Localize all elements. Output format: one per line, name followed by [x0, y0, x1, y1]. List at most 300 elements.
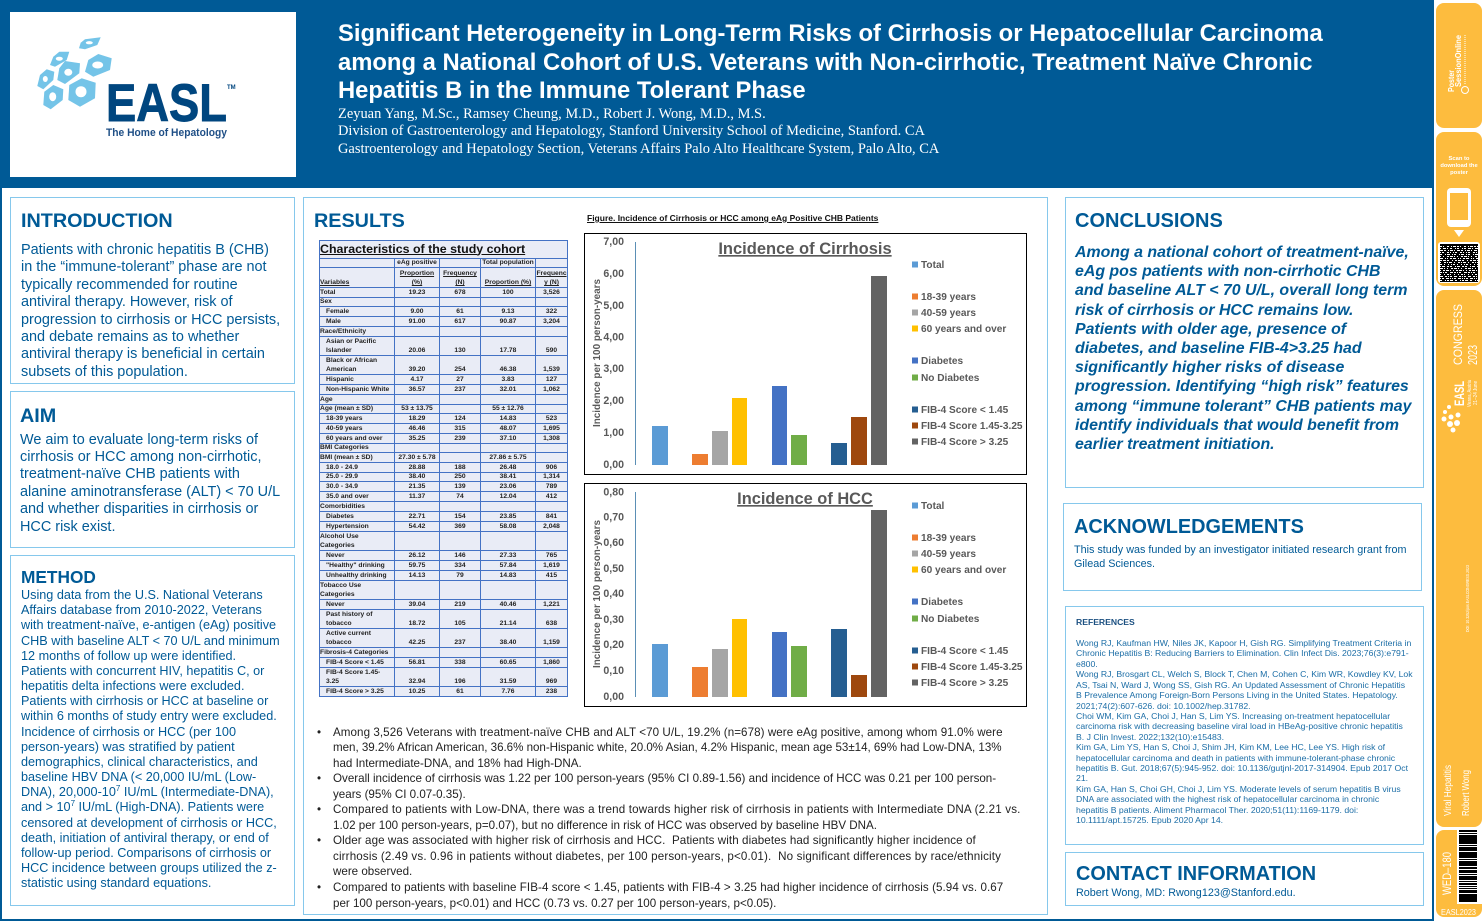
text: contact: Robert Wong, MD: Rwong123@Stanford.edu.: [1076, 886, 1296, 898]
bar chart: incidence of cirrhosis: Total: [921, 260, 945, 271]
panel: references: [1065, 606, 1424, 845]
sidebar: poster session online: SessionOnline: [1454, 34, 1463, 87]
text: method: demographics, clinical characteristics, and: [21, 755, 258, 769]
table: characteristics of the study cohort: Proportion (%): [485, 279, 531, 286]
table: characteristics of the study cohort: Asian or Pacific: [326, 338, 376, 345]
bar chart: incidence of HCC: 0,10: [603, 665, 624, 677]
text: method: Affairs database from 2010-2022, Veterans: [21, 603, 262, 617]
text: conclusions: and baseline ALT < 70 U/L, overall long term: [1075, 282, 1407, 299]
table: characteristics of the study cohort: 27: [456, 376, 464, 383]
sidebar: scan to download with phone and QR code: Scan to: [1449, 156, 1470, 162]
bar chart: incidence of HCC: 0,50: [603, 563, 624, 575]
frame right edge: [1432, 0, 1434, 921]
table: characteristics of the study cohort: 638: [546, 620, 557, 627]
table: characteristics of the study cohort: Male: [326, 318, 341, 325]
table: characteristics of the study cohort: 7.76: [501, 688, 515, 695]
text: method: Incidence of cirrhosis or HCC (per 100: [21, 725, 236, 739]
table: characteristics of the study cohort: 39.04: [409, 601, 425, 608]
table: characteristics of the study cohort: 91.00: [409, 318, 425, 325]
table: characteristics of the study cohort: 55 ± 12.76: [492, 405, 524, 412]
table: characteristics of the study cohort: Total: [320, 289, 335, 296]
table: characteristics of the study cohort: 1,619: [543, 562, 560, 569]
frame bottom edge: [0, 919, 1434, 921]
bar chart: incidence of HCC: Incidence per 100 person-years: [592, 520, 603, 668]
bar chart: incidence of cirrhosis: [584, 233, 1027, 475]
table: characteristics of the study cohort: 841: [546, 513, 557, 520]
table: characteristics of the study cohort: 617: [454, 318, 466, 325]
authors and affiliations: [338, 106, 940, 157]
table: characteristics of the study cohort: 789: [546, 483, 557, 490]
table: characteristics of the study cohort: 3.25: [326, 678, 339, 685]
sidebar: poster session online: [1436, 3, 1482, 128]
bar chart: incidence of cirrhosis: 3,00: [603, 363, 624, 375]
table: characteristics of the study cohort: 146: [454, 552, 466, 559]
bar chart: incidence of cirrhosis: 40-59 years: [921, 308, 976, 319]
bar chart: incidence of cirrhosis: 1,00: [603, 427, 624, 439]
text: aim: and whether disparities in cirrhosis or: [20, 501, 258, 517]
bar chart: incidence of HCC: 0,00: [603, 691, 624, 703]
table: characteristics of the study cohort: 60 years and over: [326, 435, 383, 442]
table: characteristics of the study cohort: 139: [454, 483, 466, 490]
table: characteristics of the study cohort: 46.46: [409, 425, 425, 432]
table: characteristics of the study cohort: Proportion (%): [400, 270, 434, 286]
table: characteristics of the study cohort: 19.23: [409, 289, 425, 296]
table: characteristics of the study cohort: 100: [502, 289, 514, 296]
sidebar: abstract number and barcode: [1436, 830, 1482, 917]
bar chart: incidence of cirrhosis: 7,00: [603, 236, 624, 248]
table: characteristics of the study cohort: 154: [454, 513, 466, 520]
table: characteristics of the study cohort: 415: [546, 572, 557, 579]
text: conclusions: eAg pos patients with non-cirrhotic CHB: [1075, 263, 1380, 280]
table: characteristics of the study cohort: Frequenc y (N): [536, 270, 567, 286]
text: introduction: subsets of this population.: [21, 364, 188, 380]
bar chart: incidence of HCC: Total: [921, 501, 945, 512]
table: characteristics of the study cohort: 237: [454, 639, 466, 646]
table: characteristics of the study cohort: American: [326, 366, 356, 373]
text: aim: alanine aminotransferase (ALT) < 70 U/L: [20, 484, 280, 500]
table: characteristics of the study cohort: 60.65: [500, 659, 516, 666]
table: characteristics of the study cohort: 18.0 - 24.9: [326, 464, 358, 471]
frame left edge: [0, 188, 2, 921]
text: method: 12 months of follow up were identified.: [21, 649, 236, 663]
text: references: hepatitis B. Gut. 2018;67(5):945-952. doi: 10.1136/gutjnl-2017-314904. Epub 2017 Oct: [1076, 763, 1408, 773]
table: characteristics of the study cohort: tobacco: [326, 620, 352, 627]
authors and affiliations: Zeyuan Yang, M.Sc., Ramsey Cheung, M.D., Robert J. Wong, M.D., M.S.: [338, 106, 766, 122]
table: characteristics of the study cohort: 1,159: [543, 639, 560, 646]
bar chart: incidence of HCC: 40-59 years: [921, 549, 976, 560]
text: introduction: progression to cirrhosis or HCC persists,: [21, 312, 280, 328]
sidebar: poster session panels: [1436, 3, 1482, 917]
table: characteristics of the study cohort: 14.13: [409, 572, 425, 579]
bar chart: incidence of HCC: 0,80: [603, 486, 624, 498]
text: method: Patients with concurrent HIV, hepatitis C, or: [21, 664, 264, 678]
table: characteristics of the study cohort: 322: [546, 308, 557, 315]
bar chart: incidence of HCC: 0,70: [603, 512, 624, 524]
table: characteristics of the study cohort: 23.85: [500, 513, 516, 520]
heading: contact information: CONTACT INFORMATION: [1076, 863, 1316, 885]
table: characteristics of the study cohort: 969: [546, 678, 557, 685]
title: Significant Heterogeneity in Long-Term Risks of Cirrhosis or Hepatocellular Carcinoma: [338, 20, 1323, 47]
table: characteristics of the study cohort: 219: [454, 601, 466, 608]
table: characteristics of the study cohort: 37.10: [500, 435, 516, 442]
table: characteristics of the study cohort: 23.06: [500, 483, 516, 490]
table: characteristics of the study cohort: 1,860: [543, 659, 560, 666]
table: characteristics of the study cohort: 48.07: [500, 425, 516, 432]
text: method: HCC incidence between groups utilized the z-: [21, 861, 277, 875]
table: characteristics of the study cohort: Race/Ethnicity: [320, 328, 366, 335]
results bullets: Among 3,526 Veterans with treatment-naïve CHB and ALT <70 U/L, 19.2% (n=678) were eAg positive, among whom 91.0% were: [333, 726, 1003, 738]
table: characteristics of the study cohort: Age: [320, 396, 333, 403]
bar chart: incidence of HCC: Incidence of HCC: [737, 490, 873, 508]
table: characteristics of the study cohort: 27.30 ± 5.78: [398, 454, 436, 461]
table: characteristics of the study cohort: 12.04: [500, 493, 516, 500]
table: characteristics of the study cohort: 90.87: [500, 318, 516, 325]
text: references: Kim GA, Han S, Choi GH, Choi J, Lim YS. Moderate levels of serum hepatitis B virus: [1076, 784, 1401, 794]
table: characteristics of the study cohort: 14.83: [500, 572, 516, 579]
heading: acknowledgements: ACKNOWLEDGEMENTS: [1074, 516, 1304, 538]
header band: [0, 0, 1434, 188]
results bullets: men, 39.2% African American, 36.6% non-Hispanic white, 20.0% Asian, 4.2% Hispanic, mean age 53±14, 69% had Low-DNA, 13%: [333, 741, 1002, 754]
table: characteristics of the study cohort: 79: [456, 572, 464, 579]
table: characteristics of the study cohort: tobacco: [326, 639, 352, 646]
table: characteristics of the study cohort: 27.86 ± 5.75: [489, 454, 527, 461]
table: characteristics of the study cohort: 27.33: [500, 552, 516, 559]
table: characteristics of the study cohort: 38.40: [409, 473, 425, 480]
text: conclusions: Among a national cohort of treatment-naïve,: [1075, 244, 1409, 261]
table: characteristics of the study cohort: 254: [454, 366, 466, 373]
table: characteristics of the study cohort: 38.41: [500, 473, 516, 480]
table: characteristics of the study cohort: BMI (mean ± SD): [320, 454, 373, 461]
text: references: e800.: [1076, 659, 1098, 669]
text: references: Wong RJ, Brosgart CL, Welch S, Block T, Chen M, Cohen C, Kim WR, Kowdley KV, Lok: [1076, 669, 1413, 679]
table: characteristics of the study cohort: Total population: [482, 259, 534, 266]
table: characteristics of the study cohort: 105: [454, 620, 466, 627]
table: characteristics of the study cohort: Categories: [320, 591, 355, 598]
text: acknowledgements: [1074, 544, 1406, 570]
figure caption: Figure. Incidence of Cirrhosis or HCC among eAg Positive CHB Patients: [587, 213, 878, 223]
text: references: hepatocellular carcinoma and death in patients with immune-tolerant-phase chronic: [1076, 753, 1395, 763]
text: conclusions: among “immune tolerant” CHB patients may: [1075, 398, 1411, 415]
results bullets: •: [317, 881, 321, 894]
bar chart: incidence of cirrhosis: Incidence per 100 person-years: [592, 279, 603, 427]
bar chart: incidence of HCC: 60 years and over: [921, 565, 1006, 576]
table: characteristics of the study cohort: Frequency (N): [443, 270, 477, 286]
bar chart: incidence of cirrhosis: 6,00: [603, 268, 624, 280]
table: characteristics of the study cohort: 31.59: [500, 678, 516, 685]
table: characteristics of the study cohort: 18-39 years: [326, 415, 362, 422]
table: characteristics of the study cohort: FIB-4 Score < 1.45: [326, 659, 384, 666]
results bullets: 1.02 per 100 person-years, p=0.07), but no difference in risk of HCC was observed by baseline HBV DNA.: [333, 819, 877, 832]
bar chart: incidence of cirrhosis: FIB-4 Score < 1.45: [921, 405, 1009, 416]
results bullets: •: [317, 803, 321, 816]
sidebar: abstract number and barcode: EASL2023: [1441, 908, 1476, 917]
table: characteristics of the study cohort: 28.88: [409, 464, 425, 471]
table: characteristics of the study cohort: Categories: [320, 542, 355, 549]
table: characteristics of the study cohort: FIB-4 Score 1.45-: [326, 669, 380, 676]
text: references: Kim GA, Lim YS, Han S, Choi J, Shim JH, Kim KM, Lee HC, Lee YS. High risk of: [1076, 742, 1385, 752]
text: references: Choi WM, Kim GA, Choi J, Han S, Lim YS. Increasing on-treatment hepatocellular: [1076, 711, 1390, 721]
bar chart: incidence of HCC: FIB-4 Score 1.45-3.25: [921, 662, 1023, 673]
text: references: [1076, 638, 1413, 825]
text: conclusions: earlier treatment initiation.: [1075, 436, 1275, 453]
table: characteristics of the study cohort: 40-59 years: [326, 425, 362, 432]
text: method: hepatitis delta infections were excluded.: [21, 679, 244, 693]
text: references: B Prevalence Among Foreign-Born Persons Living in the United States. Hepatology.: [1076, 690, 1398, 700]
text: conclusions: progression. Identifying “high risk” features: [1075, 378, 1409, 395]
table: characteristics of the study cohort: 36.57: [409, 386, 425, 393]
table: characteristics of the study cohort: 127: [546, 376, 557, 383]
table: characteristics of the study cohort: Black or African: [326, 357, 377, 364]
table: characteristics of the study cohort: 26.48: [500, 464, 516, 471]
table: characteristics of the study cohort: 1,221: [543, 601, 560, 608]
text: aim: cirrhosis or HCC among non-cirrhotic,: [20, 449, 262, 465]
table: characteristics of the study cohort: 906: [546, 464, 557, 471]
heading: results: RESULTS: [314, 210, 405, 232]
table: characteristics of the study cohort: 30.0 - 34.9: [326, 483, 358, 490]
panel: acknowledgements: [1063, 503, 1422, 591]
text: method: DNA), 20,000-107 IU/mL (Intermediate-DNA),: [21, 784, 274, 799]
table: characteristics of the study cohort: 20.06: [409, 347, 425, 354]
table: characteristics of the study cohort: 14.83: [500, 415, 516, 422]
table: characteristics of the study cohort: Diabetes: [326, 513, 354, 520]
text: method: person-years) was stratified by patient: [21, 740, 235, 754]
table: characteristics of the study cohort: 35.25: [409, 435, 425, 442]
sidebar: EASL congress details: 2023: [1465, 345, 1480, 365]
text: method: statistic using standard equations.: [21, 876, 211, 890]
table: characteristics of the study cohort: 26.12: [409, 552, 425, 559]
text: method: with treatment-naïve, e-antigen (eAg) positive: [21, 618, 276, 632]
text: references: Wong RJ, Kaufman HW, Niles JK, Kapoor H, Gish RG. Simplifying Treatment Criteria in: [1076, 638, 1411, 648]
text: method: and > 107 IU/mL (High-DNA). Patients were: [21, 799, 264, 814]
bar chart: incidence of HCC: FIB-4 Score < 1.45: [921, 646, 1009, 657]
table: characteristics of the study cohort: 58.08: [500, 523, 516, 530]
text: conclusions: identify individuals that would benefit from: [1075, 417, 1399, 434]
panel: conclusions: [1065, 197, 1424, 488]
text: method: follow-up period. Comparisons of cirrhosis or: [21, 846, 271, 860]
text: aim: We aim to evaluate long-term risks of: [20, 432, 258, 448]
text: method: [21, 588, 280, 890]
logo: EASL: [10, 12, 296, 177]
table: characteristics of the study cohort: Never: [326, 601, 345, 608]
table: characteristics of the study cohort: 11.37: [409, 493, 425, 500]
table: characteristics of the study cohort: 18.72: [409, 620, 425, 627]
title: [338, 20, 1323, 104]
table: characteristics of the study cohort: eAg positive: [397, 259, 437, 266]
table: characteristics of the study cohort: 239: [454, 435, 466, 442]
table: characteristics of the study cohort: Islander: [326, 347, 352, 354]
table: characteristics of the study cohort: 42.25: [409, 639, 425, 646]
bar chart: incidence of cirrhosis: 0,00: [603, 459, 624, 471]
bar chart: incidence of HCC: FIB-4 Score > 3.25: [921, 678, 1009, 689]
results bullets: were observed.: [333, 865, 412, 878]
text: references: hepatitis B patients. Aliment Pharmacol Ther. 2020;51(11):1169-1179. doi:: [1076, 805, 1358, 815]
text: method: Using data from the U.S. National Veterans: [21, 588, 263, 602]
table: characteristics of the study cohort: 412: [546, 493, 557, 500]
text: conclusions: risk of cirrhosis or HCC remains low.: [1075, 302, 1353, 319]
table: characteristics of the study cohort: 57.84: [500, 562, 516, 569]
text: references: B. J Clin Invest. 2022;132(10):e15483.: [1076, 732, 1224, 742]
table: characteristics of the study cohort: 130: [454, 347, 466, 354]
table: characteristics of the study cohort: 523: [546, 415, 557, 422]
text: references: 10.1111/apt.15725. Epub 2020 Apr 14.: [1076, 815, 1223, 825]
bar chart: incidence of cirrhosis: 2,00: [603, 395, 624, 407]
table: characteristics of the study cohort: 1,308: [543, 435, 560, 442]
bar chart: incidence of cirrhosis: FIB-4 Score 1.45-3.25: [921, 421, 1023, 432]
authors and affiliations: Division of Gastroenterology and Hepatology, Stanford University School of Medicine, Stanford. CA: [338, 123, 925, 139]
bar chart: incidence of HCC: [584, 483, 1027, 707]
sidebar: scan to download with phone and QR code: download the: [1440, 163, 1478, 169]
logo: EASL: The Home of Hepatology: [106, 127, 228, 139]
text: introduction: [21, 242, 280, 380]
results bullets: had Intermediate-DNA, and 18% had High-DNA.: [333, 757, 582, 770]
table: characteristics of the study cohort: Non-Hispanic White: [326, 386, 389, 393]
results bullets: per 100 person-years, p<0.01) and HCC (0.73 vs. 0.27 per 100 person-years, p<0.05).: [333, 897, 776, 910]
table: characteristics of the study cohort: Age (mean ± SD): [320, 405, 373, 412]
table: characteristics of the study cohort: 2,048: [543, 523, 560, 530]
bar chart: incidence of HCC: 18-39 years: [921, 533, 976, 544]
table: characteristics of the study cohort: 238: [546, 688, 557, 695]
bar chart: incidence of HCC: 0,60: [603, 537, 624, 549]
table: characteristics of the study cohort: Characteristics of the study cohort: [320, 242, 525, 256]
sidebar: poster session online: Poster: [1447, 70, 1456, 92]
table: characteristics of the study cohort: Sex: [320, 298, 332, 305]
panel: results: [303, 197, 1048, 915]
table: characteristics of the study cohort: 250: [454, 473, 466, 480]
table: characteristics of the study cohort: Active current: [326, 630, 371, 637]
table: characteristics of the study cohort: Variables: [320, 279, 349, 286]
text: method: censored at development of cirrhosis or HCC,: [21, 816, 277, 830]
logo: EASL: TM: [227, 85, 236, 91]
table: characteristics of the study cohort: Fibrosis-4 Categories: [320, 649, 388, 656]
table: characteristics of the study cohort: 338: [454, 659, 466, 666]
table: characteristics of the study cohort: 3,204: [543, 318, 560, 325]
panel: method: [10, 555, 295, 906]
bar chart: incidence of cirrhosis: 4,00: [603, 332, 624, 344]
text: references: AS, Tsai N, Ward J, Wong SS, Gish RG. An Updated Assessment of Chronic Hepatitis: [1076, 680, 1405, 690]
sidebar: abstract number and barcode: WED–180: [1442, 852, 1454, 895]
table: characteristics of the study cohort: 4.17: [410, 376, 424, 383]
table: characteristics of the study cohort: [319, 240, 568, 697]
heading: references: REFERENCES: [1076, 617, 1135, 627]
table: characteristics of the study cohort: 188: [454, 464, 466, 471]
table: characteristics of the study cohort: "Healthy" drinking: [326, 562, 385, 569]
bar chart: incidence of HCC: 0,30: [603, 614, 624, 626]
text: aim: [20, 432, 280, 535]
text: conclusions: significantly higher risks of disease: [1075, 359, 1344, 376]
table: characteristics of the study cohort: 21.14: [500, 620, 516, 627]
results bullets: Compared to patients with baseline FIB-4 score < 1.45, patients with FIB-4 > 3.25 had higher incidence of cirrhosis (5.94 vs. 0.67: [333, 881, 1003, 894]
table: characteristics of the study cohort: FIB-4 Score > 3.25: [326, 688, 384, 695]
heading: conclusions: CONCLUSIONS: [1075, 210, 1223, 232]
text: introduction: typically recommended for routine: [21, 277, 238, 293]
table: characteristics of the study cohort: 590: [546, 347, 557, 354]
table: characteristics of the study cohort: 18.29: [409, 415, 425, 422]
bar chart: incidence of HCC: No Diabetes: [921, 614, 980, 625]
bar chart: incidence of cirrhosis: 18-39 years: [921, 292, 976, 303]
sidebar: EASL congress details: 21–24 June: [1473, 381, 1479, 405]
sidebar: EASL congress details: Viral Hepatitis: [1443, 765, 1454, 816]
text: acknowledgements: Gilead Sciences.: [1074, 558, 1155, 570]
bar chart: incidence of HCC: Diabetes: [921, 597, 963, 608]
text: introduction: Patients with chronic hepatitis B (CHB): [21, 242, 269, 258]
results bullets: •: [317, 726, 321, 738]
table: characteristics of the study cohort: 315: [454, 425, 466, 432]
table: characteristics of the study cohort: 124: [454, 415, 466, 422]
results bullets: cirrhosis (2.49 vs. 0.96 in patients without diabetes, per 100 person-years, p<0.01). No significant differences by race/ethnicity: [333, 850, 1001, 863]
table: characteristics of the study cohort: 38.40: [500, 639, 516, 646]
bar chart: incidence of cirrhosis: 60 years and over: [921, 324, 1006, 335]
text: introduction: antiviral therapy is beneficial in certain: [21, 346, 265, 362]
text: conclusions: [1074, 244, 1412, 453]
table: characteristics of the study cohort: 10.25: [409, 688, 425, 695]
results bullets: Older age was associated with higher risk of cirrhosis and HCC. Patients with diabetes had significantly higher incidence of: [333, 834, 976, 847]
title: among a National Cohort of U.S. Veterans with Non-cirrhotic, Treatment Naïve Chronic: [338, 49, 1312, 76]
bar chart: incidence of cirrhosis: No Diabetes: [921, 373, 980, 384]
table: characteristics of the study cohort: BMI Categories: [320, 444, 369, 451]
results bullets: [317, 726, 1021, 910]
results bullets: •: [317, 834, 321, 847]
table: characteristics of the study cohort: 1,695: [543, 425, 560, 432]
table: characteristics of the study cohort: 1,062: [543, 386, 560, 393]
results bullets: Overall incidence of cirrhosis was 1.22 per 100 person-years (95% CI 0.89-1.56) and incidence of HCC was 0.21 per 100 person-: [333, 772, 996, 785]
table: characteristics of the study cohort: 9.00: [410, 308, 424, 315]
bar chart: incidence of HCC: 0,40: [603, 588, 624, 600]
table: characteristics of the study cohort: 35.0 and over: [326, 493, 369, 500]
text: references: DNA are associated with the highest risk of hepatocellular carcinoma in chronic: [1076, 794, 1379, 804]
text: method: CHB with baseline ALT < 70 U/L and minimum: [21, 634, 280, 648]
logo: EASL: EASL: [106, 74, 227, 133]
heading: introduction: INTRODUCTION: [21, 210, 173, 232]
text: method: baseline HBV DNA (< 20,000 IU/mL (Low-: [21, 770, 256, 784]
bar chart: incidence of cirrhosis: Incidence of Cirrhosis: [718, 240, 892, 258]
table: characteristics of the study cohort: 22.71: [409, 513, 425, 520]
table: characteristics of the study cohort: Past history of: [326, 611, 372, 618]
table: characteristics of the study cohort: 17.78: [500, 347, 516, 354]
text: acknowledgements: This study was funded by an investigator initiated research grant from: [1074, 544, 1406, 556]
heading: method: METHOD: [21, 567, 96, 587]
text: aim: HCC risk exist.: [20, 519, 115, 535]
table: characteristics of the study cohort: 54.42: [409, 523, 425, 530]
authors and affiliations: Gastroenterology and Hepatology Section, Veterans Affairs Palo Alto Healthcare System, Palo Alto, CA: [338, 141, 939, 157]
text: introduction: in the “immune-tolerant” phase are not: [21, 259, 267, 275]
table: characteristics of the study cohort: 32.94: [409, 678, 425, 685]
text: conclusions: diabetes, and baseline FIB-4>3.25 had: [1075, 340, 1362, 357]
text: conclusions: Patients with older age, presence of: [1075, 321, 1346, 338]
table: characteristics of the study cohort: 3,526: [543, 289, 560, 296]
text: method: Patients with cirrhosis or HCC at baseline or: [21, 694, 268, 708]
sidebar: EASL congress details: DOI: 10.3252/pos.EASLCONGRESS.2023: [1465, 565, 1471, 632]
text: references: Chronic Hepatitis B: Reducing Barriers to Elimination. Clin Infect Dis. 2023;76(3):e791-: [1076, 648, 1409, 658]
sidebar: scan to download with phone and QR code: poster: [1450, 170, 1469, 176]
sidebar: EASL congress details: EASL: [1451, 381, 1467, 406]
panel: contact information: [1065, 852, 1424, 906]
table: characteristics of the study cohort: 46.38: [500, 366, 516, 373]
bar chart: incidence of cirrhosis: Diabetes: [921, 356, 963, 367]
text: aim: treatment-naïve CHB patients with: [20, 466, 240, 482]
results bullets: •: [317, 772, 321, 785]
panel: aim: [10, 391, 295, 548]
table: characteristics of the study cohort: 59.75: [409, 562, 425, 569]
table: characteristics of the study cohort: 61: [456, 688, 464, 695]
text: introduction: antiviral therapy. However, risk of: [21, 294, 233, 310]
table: characteristics of the study cohort: 56.81: [409, 659, 425, 666]
table: characteristics of the study cohort: Female: [326, 308, 349, 315]
table: characteristics of the study cohort: 1,314: [543, 473, 560, 480]
table: characteristics of the study cohort: 237: [454, 386, 466, 393]
table: characteristics of the study cohort: 74: [456, 493, 464, 500]
sidebar: scan to download with phone and QR code: [1436, 132, 1482, 286]
table: characteristics of the study cohort: 21.35: [409, 483, 425, 490]
